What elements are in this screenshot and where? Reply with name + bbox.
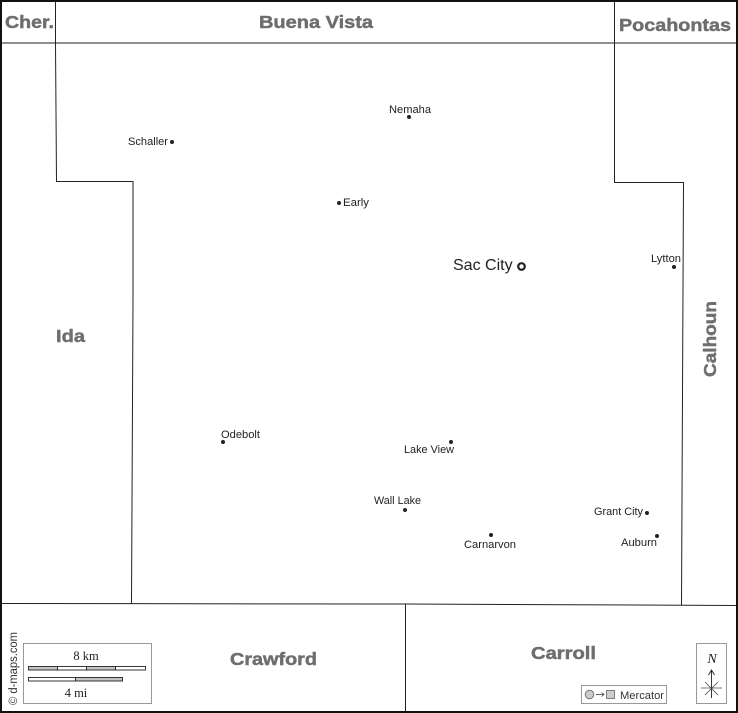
region label: Calhoun: Calhoun (700, 301, 720, 377)
city: Wall Lake: Wall Lake (374, 495, 421, 507)
scale bar: 4 mi (65, 686, 88, 700)
projection legend (582, 686, 666, 704)
city: Sac City: Sac City (453, 257, 513, 274)
city: Carnarvon (464, 533, 516, 551)
city: Auburn: Auburn (621, 537, 657, 549)
city: Grant City: Grant City (594, 506, 644, 518)
copyright: © d-maps.com (8, 632, 20, 705)
city: Lake View: Lake View (404, 444, 454, 456)
region label: Crawford: Crawford (230, 649, 317, 669)
scale bar (24, 644, 152, 704)
region label: Ida: Ida (56, 326, 85, 346)
city: Nemaha: Nemaha (389, 104, 431, 116)
projection legend: Mercator (620, 690, 664, 702)
region label: Cher.: Cher. (5, 12, 54, 32)
city: Early: Early (343, 197, 370, 209)
city: Carnarvon: Carnarvon (464, 539, 516, 551)
region label: Carroll: Carroll (531, 643, 596, 663)
north compass: N (706, 652, 717, 667)
city: Lytton: Lytton (651, 253, 681, 265)
scale bar: 8 km (73, 649, 99, 663)
region label: Buena Vista: Buena Vista (259, 12, 373, 32)
city: Odebolt: Odebolt (221, 429, 260, 441)
region label: Pocahontas: Pocahontas (619, 15, 731, 35)
city: Schaller: Schaller (128, 136, 168, 148)
north compass (696, 644, 726, 704)
